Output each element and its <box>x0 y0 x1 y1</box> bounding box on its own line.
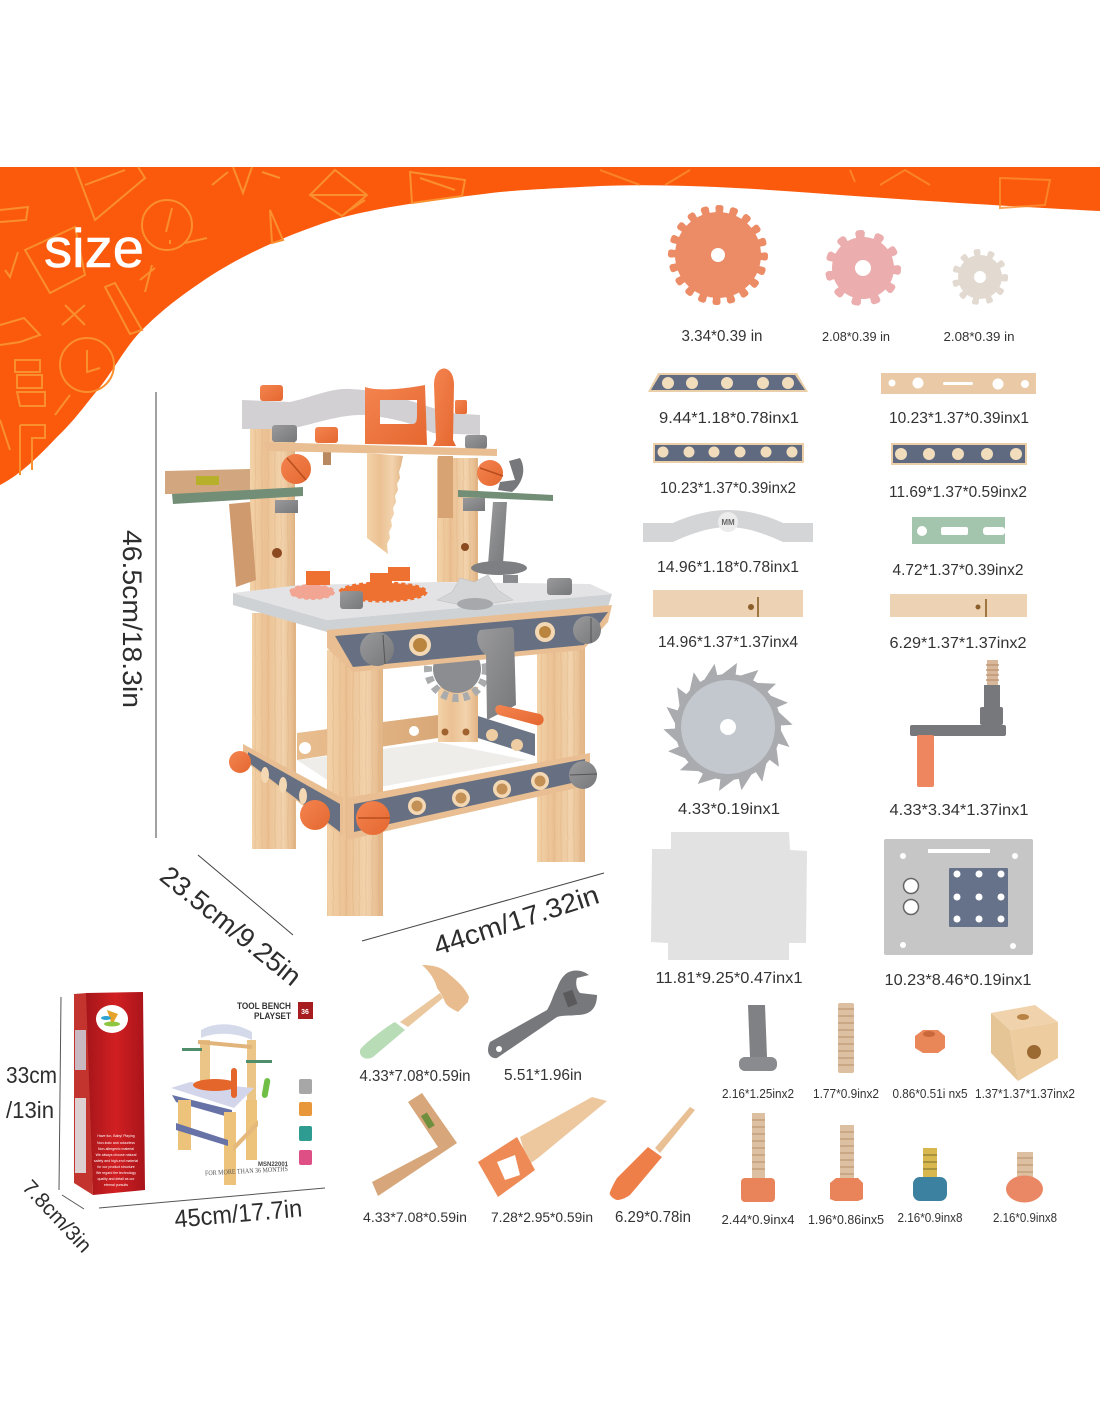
label: 11.81*9.25*0.47inx1 <box>656 970 803 987</box>
rear lower parts <box>252 613 585 862</box>
part: long navy beam <box>648 373 808 392</box>
part: pink gear <box>828 232 898 304</box>
label: 14.96*1.37*1.37inx4 <box>658 634 798 651</box>
gear labels <box>682 328 1014 345</box>
part: saw blade disc <box>663 663 793 791</box>
part: wood cube <box>991 1005 1058 1081</box>
label: 14.96*1.18*0.78inx1 <box>657 559 799 576</box>
part: grey bolt <box>739 1005 777 1071</box>
product box: front panel: TOOL BENCH <box>237 1001 291 1011</box>
label: 10.23*8.46*0.19inx1 <box>884 972 1032 989</box>
small screw labels <box>722 1210 1057 1227</box>
part: long orange screw <box>741 1113 775 1202</box>
small screw labels: 1.96*0.86inx5 <box>808 1212 884 1227</box>
product box: side panel: Non-toxic and odourless <box>97 1141 135 1145</box>
dimension: bench width: 44cm/17.32in <box>430 880 603 961</box>
product box: side panel: quality and detail as our <box>98 1177 135 1181</box>
product box: front panel: PLAYSET <box>254 1011 291 1021</box>
small part labels <box>722 1086 1075 1101</box>
label: 4.33*7.08*0.59in <box>360 1068 470 1085</box>
small screw labels: 2.44*0.9inx4 <box>722 1212 794 1227</box>
dimension: box width: 45cm/17.7in <box>173 1195 303 1234</box>
part: cream gear <box>954 251 1006 303</box>
tool: hammer <box>360 965 469 1059</box>
part: short orange screw <box>1006 1152 1043 1202</box>
tabletop bolts and saw <box>340 575 572 610</box>
product box: side panel: Have fun, Baby! Playing <box>97 1134 135 1138</box>
label: 4.72*1.37*0.39inx2 <box>892 562 1024 579</box>
small screw labels: 2.16*0.9inx8 <box>898 1210 962 1225</box>
box feature icons <box>299 1079 312 1165</box>
title: size: size <box>44 217 144 279</box>
front legs and aprons <box>243 605 612 916</box>
wrench on stand <box>471 458 527 593</box>
product box: side panel: eternal pursuits <box>104 1183 128 1187</box>
dimension: bench depth: 23.5cm/9.25in <box>154 860 307 992</box>
table top <box>233 582 612 632</box>
dimension: box height: 33cm <box>6 1062 57 1088</box>
upper posts <box>250 429 478 593</box>
label: 10.23*1.37*0.39inx1 <box>889 410 1029 427</box>
back arch <box>242 389 480 435</box>
tool: hand saw <box>478 1097 607 1197</box>
part: wood block short <box>890 594 1027 617</box>
gear labels: 3.34*0.39 in <box>682 328 762 345</box>
orange header banner <box>0 167 1100 485</box>
part: large gear <box>670 208 766 302</box>
product box: side panel: safety and high-end material <box>94 1159 138 1163</box>
tool: square ruler <box>372 1093 457 1196</box>
part: crank <box>910 660 1006 787</box>
assembled tool bench <box>165 368 612 916</box>
label: 7.28*2.95*0.59in <box>491 1209 593 1225</box>
wooden shelf <box>263 442 497 456</box>
dimension: box depth: 7.8cm/3in <box>18 1176 96 1257</box>
product box: front panel: FOR MORE THAN 36 MONTHS <box>205 1165 288 1177</box>
part: grey arch <box>643 510 813 542</box>
part: wood block long <box>653 590 803 617</box>
small part labels: 1.37*1.37*1.37inx2 <box>975 1086 1075 1101</box>
part: navy beam short <box>653 443 804 463</box>
part: blue screw <box>913 1148 947 1201</box>
product box: side panel <box>74 992 145 1195</box>
product box: side panel: for our product structure <box>97 1165 135 1169</box>
small part labels: 1.77*0.9inx2 <box>813 1086 879 1101</box>
gear labels: 2.08*0.39 in <box>944 329 1014 344</box>
label: 4.33*3.34*1.37inx1 <box>890 802 1029 819</box>
label: 4.33*7.08*0.59in <box>363 1209 467 1225</box>
side bars with level and square <box>165 469 553 587</box>
part: grey arch: MM <box>721 518 735 527</box>
part: hex screw <box>830 1125 863 1201</box>
label: 9.44*1.18*0.78inx1 <box>659 410 799 427</box>
product box: side panel: We regard the technology <box>96 1171 136 1175</box>
dimension: box height: /13in <box>6 1097 54 1123</box>
product box: side panel: Non-allergenic material <box>98 1147 134 1151</box>
part: navy beam wide <box>891 443 1027 465</box>
dimension: bench height: 46.5cm/18.3in <box>117 530 147 708</box>
part: orange nut <box>915 1030 945 1053</box>
label: 6.29*1.37*1.37inx2 <box>890 635 1027 652</box>
tabletop gears <box>290 567 426 601</box>
small part labels: 0.86*0.51i nx5 <box>892 1086 968 1101</box>
crank handle <box>477 627 544 725</box>
part: white board <box>651 832 807 960</box>
screwdriver <box>433 368 456 518</box>
part: grey base plate <box>884 839 1033 955</box>
part: green slotted bar <box>912 517 1005 544</box>
dimension arrows: box <box>59 997 325 1209</box>
small part labels: 2.16*1.25inx2 <box>722 1086 794 1101</box>
box mini bench <box>171 1024 272 1185</box>
hand saw <box>365 385 427 554</box>
small screw labels: 2.16*0.9inx8 <box>993 1210 1057 1225</box>
bench screws <box>229 454 601 835</box>
product box: front panel: MSN22001 <box>258 1161 288 1168</box>
product box: front panel: 36 <box>301 1009 309 1016</box>
top bolts <box>260 385 487 465</box>
tool: wrench <box>488 971 597 1058</box>
banner doodle icons <box>0 167 1050 475</box>
dimension arrows: main bench <box>156 392 604 941</box>
dimension: box height <box>6 1062 57 1123</box>
product box: side panel: We always choose natural <box>96 1153 137 1157</box>
label: 4.33*0.19inx1 <box>678 801 780 818</box>
product box: front panel <box>171 1001 313 1185</box>
label: 10.23*1.37*0.39inx2 <box>660 480 796 497</box>
gear labels: 2.08*0.39 in <box>822 329 890 344</box>
label: 6.29*0.78in <box>615 1209 691 1226</box>
part: threaded dowel <box>838 1003 854 1073</box>
label: 5.51*1.96in <box>504 1067 582 1084</box>
label: 11.69*1.37*0.59inx2 <box>889 484 1027 501</box>
part: wood slotted beam <box>881 373 1036 394</box>
tool: screwdriver <box>610 1107 695 1200</box>
